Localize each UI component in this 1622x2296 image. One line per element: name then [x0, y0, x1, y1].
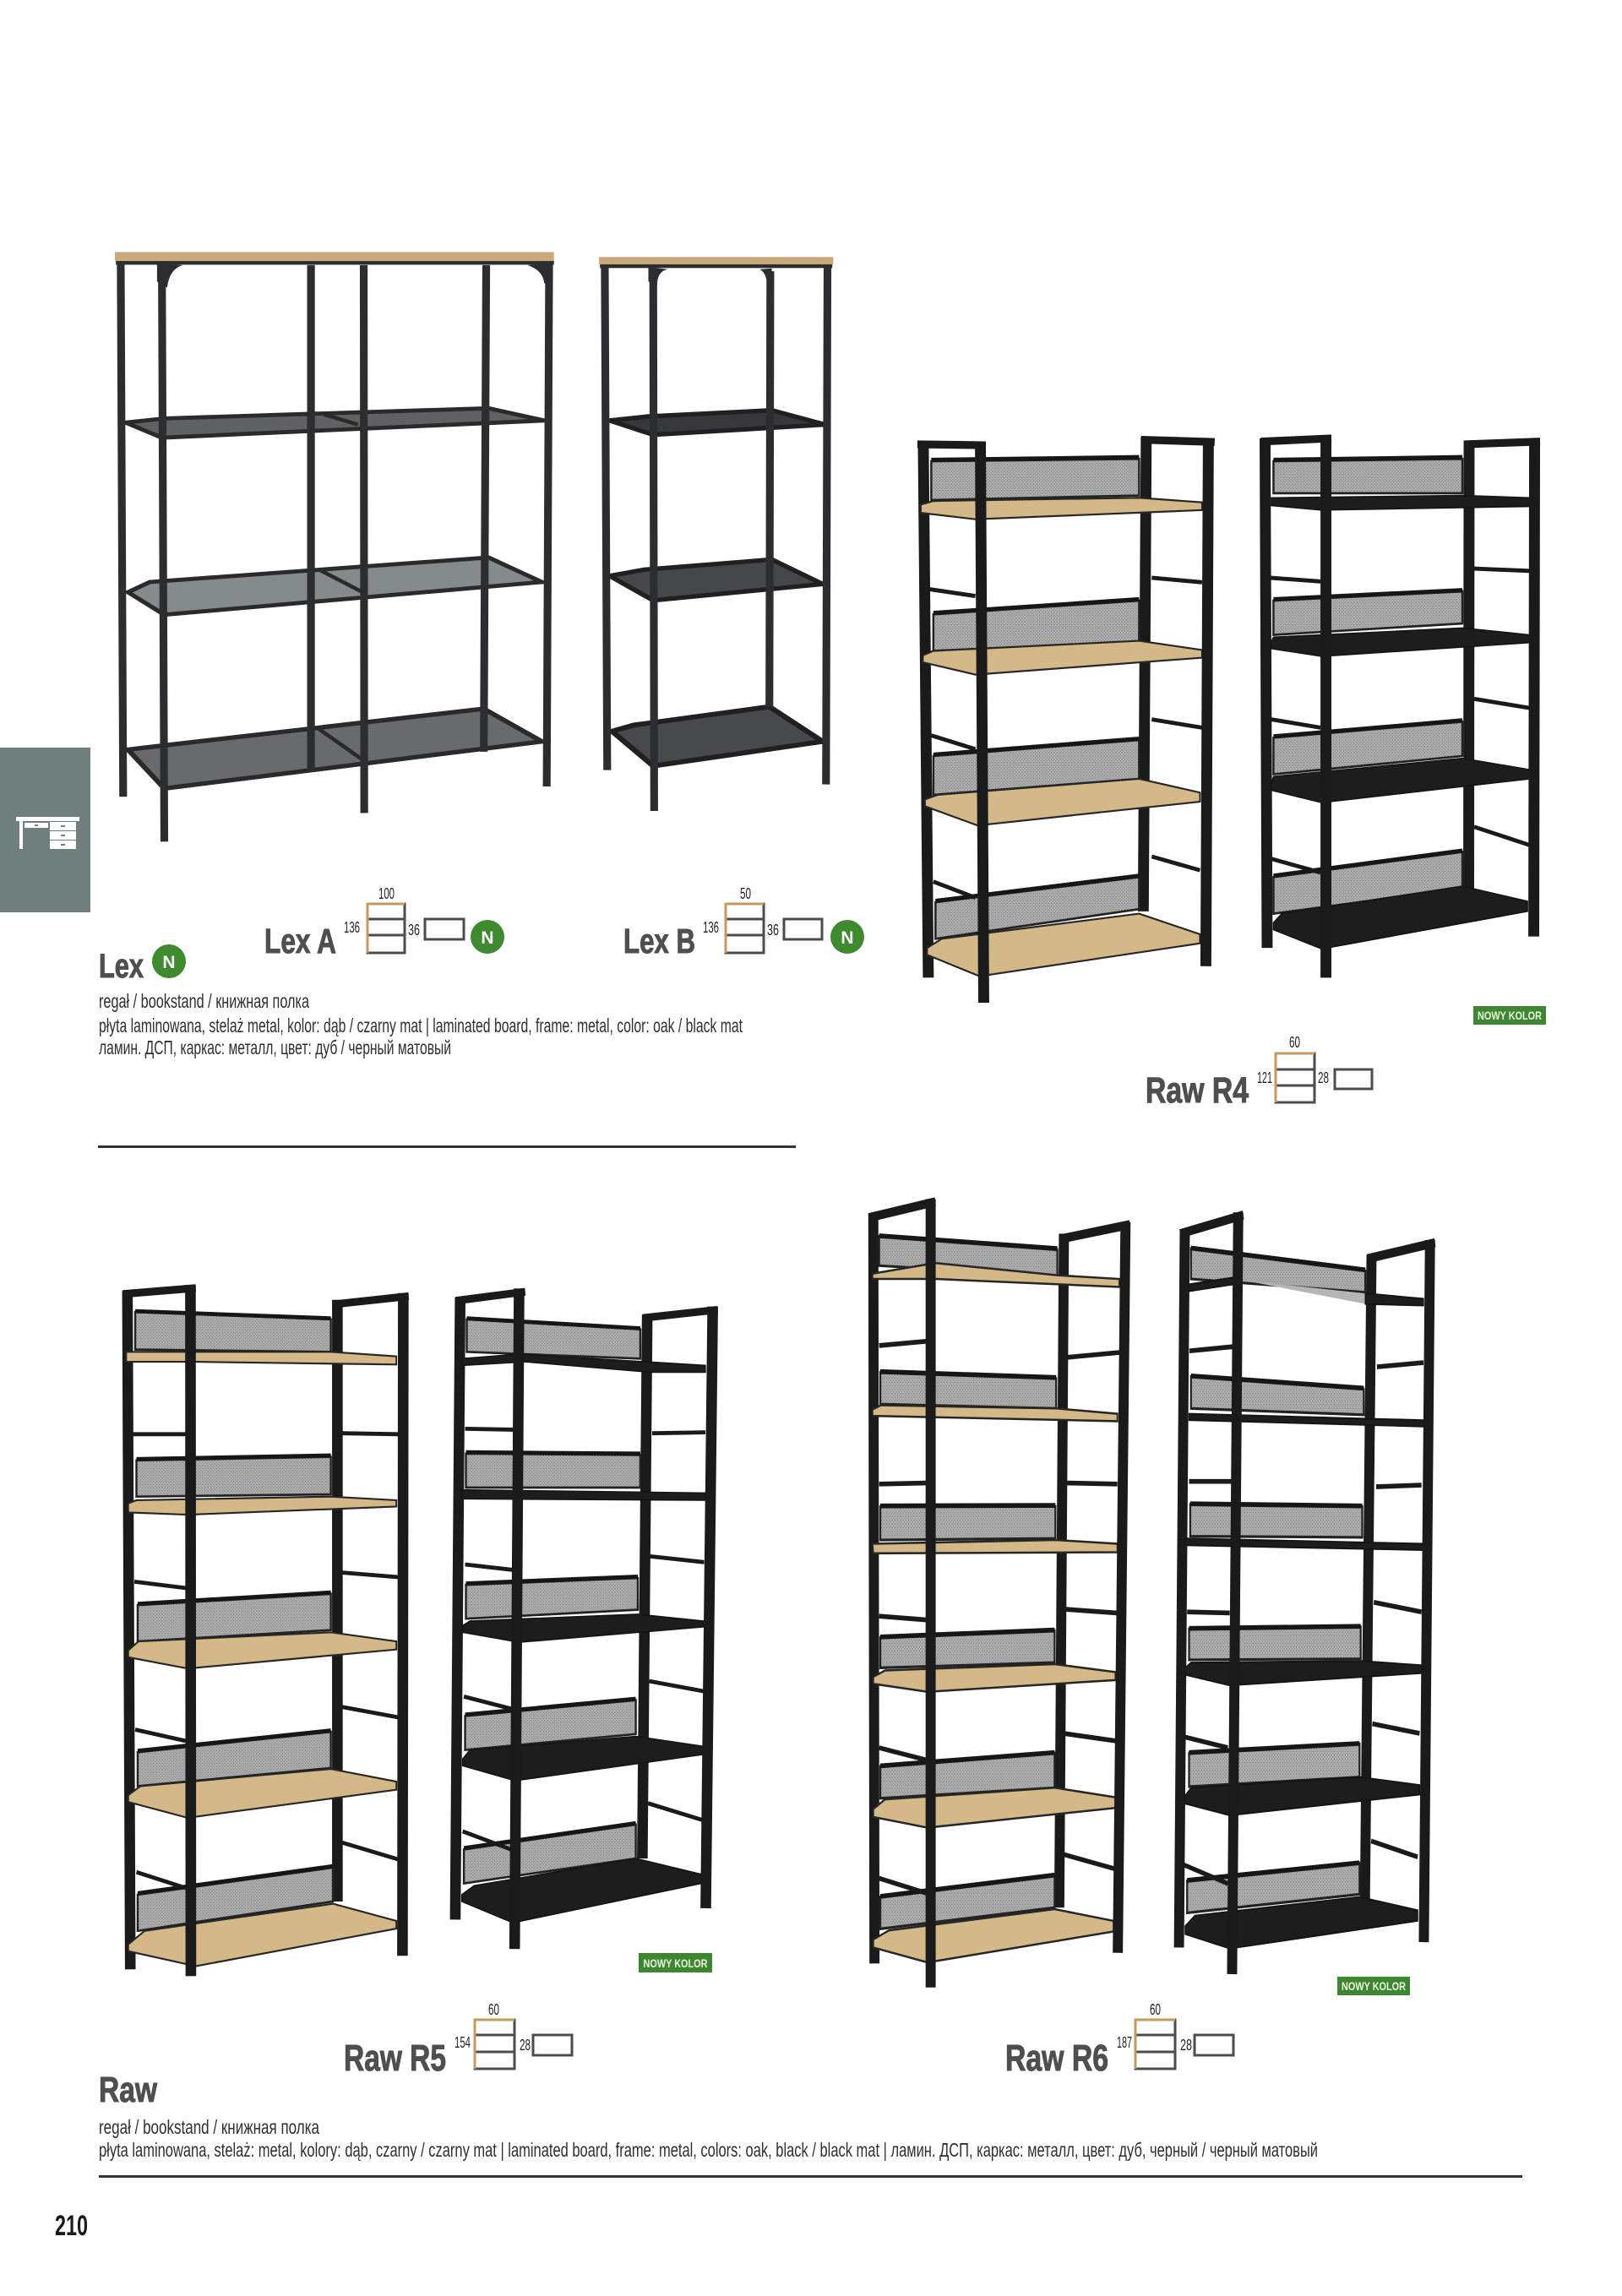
heading: Raw R5 with dimensions: Raw R5 [344, 2038, 446, 2079]
badge: nowy kolor Raw R4: NOWY KOLOR [1478, 1009, 1542, 1022]
heading: Raw R4 with dimensions: 28 [1318, 1069, 1329, 1086]
heading: Raw R4 with dimensions: Raw R4 [1146, 1070, 1249, 1111]
text block: Raw description: regał / bookstand / книжная полка [99, 2116, 319, 2138]
icon: new badge [471, 920, 504, 954]
text block: Lex description: ламин. ДСП, каркас: металл, цвет: дуб / черный матовый [99, 1036, 451, 1058]
heading: Raw R4 with dimensions [1146, 1034, 1372, 1111]
icon: new badge: N [841, 928, 854, 948]
heading: Raw R4 with dimensions: 121 [1257, 1069, 1272, 1086]
badge: nowy kolor Raw R5 [639, 1953, 712, 1972]
heading: Lex B with dimensions: 50 [740, 885, 751, 902]
product photo: Raw R6 black [1179, 1212, 1435, 1974]
heading: Raw R5 with dimensions: 28 [520, 2037, 531, 2054]
heading: Raw R6 with dimensions: 28 [1180, 2037, 1192, 2054]
product photo: Lex B shelf [599, 257, 833, 811]
text block: Raw description [99, 2116, 1318, 2161]
heading: Lex series: N [162, 953, 176, 972]
page number: 210 [55, 2210, 88, 2242]
heading: Raw R5 with dimensions: 60 [488, 2001, 499, 2018]
heading: Lex B with dimensions: 36 [767, 922, 779, 939]
text block: Lex description: płyta laminowana, stelaż metal, kolor: dąb / czarny mat | laminated board, frame: metal, color: oak / black mat [99, 1015, 743, 1036]
product photo: Raw R4 oak [917, 437, 1215, 1003]
heading: Lex A with dimensions [264, 885, 504, 960]
heading: Lex A with dimensions: 36 [408, 922, 420, 939]
badge: nowy kolor Raw R6: NOWY KOLOR [1342, 1979, 1406, 1993]
heading: Raw R6 with dimensions: 60 [1150, 2001, 1161, 2018]
product photo: Raw R4 black [1261, 435, 1540, 977]
heading: Raw R4 with dimensions: 60 [1289, 1034, 1300, 1051]
icon: desk [16, 817, 79, 849]
heading: Lex A with dimensions: Lex A [264, 922, 336, 960]
icon: new badge: N [481, 928, 494, 948]
heading: Raw R6 with dimensions: 187 [1117, 2034, 1132, 2051]
text block: Lex description [99, 990, 743, 1058]
badge: nowy kolor Raw R4 [1473, 1006, 1546, 1025]
heading: Lex A with dimensions: 100 [378, 885, 395, 902]
badge: nowy kolor Raw R5: NOWY KOLOR [644, 1956, 708, 1970]
product photo: Raw R6 oak [868, 1199, 1129, 1988]
heading: Raw R5 with dimensions: 154 [454, 2034, 471, 2051]
heading: Raw R5 with dimensions [344, 2001, 572, 2079]
heading: Lex B with dimensions [623, 885, 864, 960]
product photo: Lex A shelf [115, 252, 554, 841]
text block: Lex description: regał / bookstand / книжная полка [99, 990, 309, 1012]
heading: Lex B with dimensions: 136 [703, 919, 719, 936]
heading: Raw series: Raw [99, 2070, 157, 2109]
product photo: Raw R5 black [455, 1288, 717, 1949]
badge: nowy kolor Raw R6 [1337, 1977, 1410, 1995]
heading: Lex series: Lex [99, 948, 144, 985]
product photo: Raw R5 oak [123, 1285, 409, 1976]
heading: Lex series [99, 944, 186, 985]
heading: Lex A with dimensions: 136 [344, 919, 360, 936]
icon: new badge [830, 920, 864, 954]
heading: Raw R6 with dimensions [1005, 2001, 1233, 2079]
sidebar tab with desk icon [0, 748, 90, 912]
heading: Raw R6 with dimensions: Raw R6 [1005, 2038, 1108, 2079]
heading: Lex B with dimensions: Lex B [623, 922, 695, 960]
